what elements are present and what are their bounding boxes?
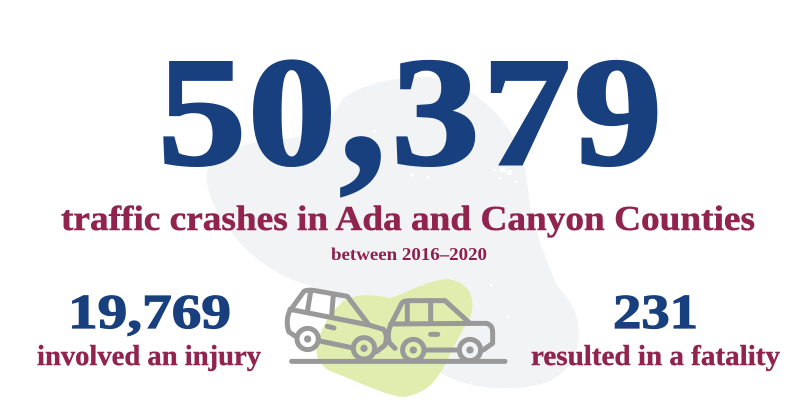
stat: fatalities: resulted in a fatality bbox=[531, 340, 780, 372]
gray background blob bbox=[207, 77, 579, 388]
main number: 5 bbox=[158, 26, 246, 198]
main number: 0 bbox=[248, 26, 336, 198]
stat: fatalities: 231 bbox=[613, 284, 698, 339]
date range: between 2016–2020 bbox=[331, 244, 487, 264]
main number: 7 bbox=[482, 26, 570, 198]
main number: 3 bbox=[392, 26, 480, 198]
stat: injuries: involved an injury bbox=[37, 340, 261, 372]
main number bbox=[158, 0, 662, 210]
stat: injuries bbox=[37, 284, 261, 372]
main number: 9 bbox=[574, 26, 662, 198]
stat: injuries: 19,769 bbox=[68, 284, 231, 339]
stat: fatalities bbox=[531, 284, 780, 372]
green blob bbox=[316, 279, 473, 397]
icon: two cars colliding bbox=[287, 290, 505, 361]
subtitle: traffic crashes in Ada and Canyon Counties bbox=[61, 199, 755, 238]
